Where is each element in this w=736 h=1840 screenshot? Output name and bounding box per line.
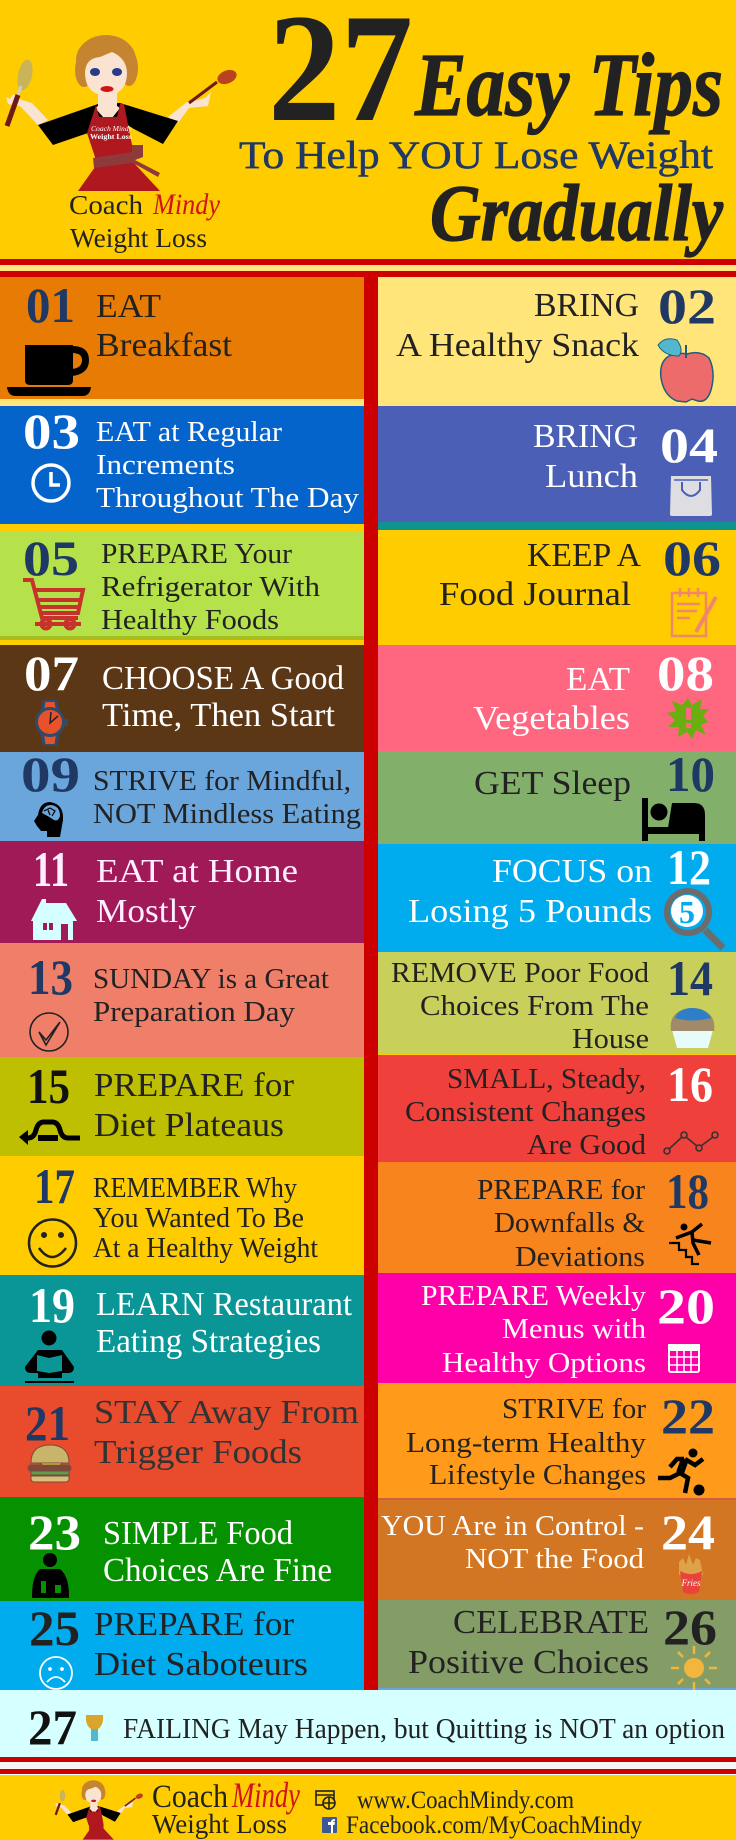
tip 11: Mostly bbox=[96, 893, 196, 930]
icon: coffee cup bbox=[7, 345, 91, 396]
tip 13: Preparation Day bbox=[93, 996, 296, 1028]
footer logo text: Mindy bbox=[231, 1775, 300, 1815]
tip 03: EAT at Regular bbox=[96, 416, 282, 448]
tip 08: EAT bbox=[566, 661, 630, 698]
logo text: Coach bbox=[69, 190, 144, 220]
tip 16: 16 bbox=[667, 1056, 713, 1112]
icon: cupcake bbox=[671, 1008, 714, 1048]
tip 23 bbox=[0, 1497, 364, 1601]
website text: www.CoachMindy.com bbox=[357, 1787, 575, 1814]
icon: fries bbox=[679, 1554, 703, 1594]
tip 24: NOT the Food bbox=[465, 1543, 645, 1575]
tip 08: 08 bbox=[657, 645, 714, 701]
tip 05: 05 bbox=[23, 530, 79, 586]
footer logo text: Coach bbox=[152, 1779, 228, 1815]
tip 01 bbox=[0, 277, 364, 406]
footer bbox=[0, 1775, 736, 1840]
tip 17: REMEMBER Why bbox=[93, 1172, 297, 1204]
tip 03: Throughout The Day bbox=[96, 482, 360, 514]
tip 20: PREPARE Weekly bbox=[421, 1280, 647, 1312]
tip 07: 07 bbox=[24, 645, 79, 701]
icon: smiley bbox=[29, 1220, 76, 1266]
tip 23: Choices Are Fine bbox=[103, 1552, 332, 1589]
tip 05: PREPARE Your bbox=[101, 538, 292, 570]
tip 23: SIMPLE Food bbox=[103, 1515, 293, 1552]
tip 18: Downfalls & bbox=[494, 1207, 645, 1239]
tip 20: Menus with bbox=[502, 1313, 647, 1345]
tip 07: Time, Then Start bbox=[102, 697, 336, 734]
tip 17 bbox=[0, 1156, 364, 1275]
tip 18: PREPARE for bbox=[477, 1174, 645, 1206]
tip 03: 03 bbox=[23, 403, 80, 459]
icon: line chart bbox=[664, 1132, 718, 1154]
footer mascot bbox=[55, 1780, 144, 1840]
tip 08: Vegetables bbox=[473, 700, 630, 737]
icon: green burst bbox=[667, 698, 709, 739]
tip 04: 04 bbox=[660, 417, 718, 473]
tip 01: EAT bbox=[96, 288, 161, 325]
icon: apple bbox=[658, 339, 713, 402]
tip 19: Eating Strategies bbox=[96, 1323, 321, 1360]
title bbox=[239, 0, 723, 258]
tip 12: FOCUS on bbox=[492, 853, 652, 890]
tip 14: REMOVE Poor Food bbox=[391, 957, 650, 989]
logo text bbox=[69, 188, 221, 253]
tip 03: Increments bbox=[96, 449, 235, 481]
tip 26: Positive Choices bbox=[408, 1644, 649, 1681]
tip 15: Diet Plateaus bbox=[94, 1107, 284, 1144]
tip 03 bbox=[0, 403, 364, 531]
tip 14: Choices From The bbox=[420, 990, 649, 1022]
tip 08 bbox=[378, 645, 736, 751]
tip 17: 17 bbox=[34, 1158, 75, 1214]
tip 09 bbox=[0, 746, 364, 841]
tip 02: 02 bbox=[658, 278, 716, 334]
tip 26: CELEBRATE bbox=[453, 1604, 649, 1641]
icon: falling on stairs bbox=[669, 1224, 711, 1264]
icon: web bbox=[316, 1791, 335, 1809]
tip 12: 12 bbox=[667, 839, 711, 895]
tip 16 bbox=[378, 1055, 736, 1162]
tip 13: 13 bbox=[28, 949, 73, 1005]
tip 22 bbox=[378, 1383, 736, 1500]
tip 19: 19 bbox=[29, 1277, 75, 1333]
tip 15 bbox=[0, 1057, 364, 1156]
icon: runner with ball bbox=[658, 1448, 704, 1496]
tip 14: 14 bbox=[667, 950, 713, 1006]
tip 13 bbox=[0, 943, 364, 1057]
logo text: Weight Loss bbox=[70, 223, 207, 253]
tip 15: PREPARE for bbox=[94, 1067, 295, 1104]
tip 16: SMALL, Steady, bbox=[447, 1063, 646, 1095]
icon: facebook bbox=[322, 1817, 337, 1833]
tip 25: PREPARE for bbox=[94, 1606, 295, 1643]
tip 06: 06 bbox=[663, 530, 721, 586]
icon: sad face bbox=[40, 1657, 72, 1689]
tip 19: LEARN Restaurant bbox=[96, 1286, 353, 1323]
icon: sun bbox=[671, 1646, 717, 1690]
tip 22: Lifestyle Changes bbox=[429, 1459, 646, 1491]
tip 18 bbox=[378, 1162, 736, 1273]
tip 06: Food Journal bbox=[439, 576, 631, 613]
title: To Help YOU Lose Weight bbox=[239, 134, 713, 177]
icon: magnifier bbox=[667, 891, 723, 948]
tip 27 bbox=[0, 1690, 736, 1757]
tip 14 bbox=[378, 950, 736, 1055]
tip 09: NOT Mindless Eating bbox=[93, 798, 361, 830]
tip 07 bbox=[0, 645, 364, 752]
tip 06 bbox=[378, 530, 736, 645]
tip 20: Healthy Options bbox=[442, 1347, 646, 1379]
footer logo text: Weight Loss bbox=[152, 1809, 287, 1839]
center divider bbox=[364, 277, 378, 1690]
tip 04: Lunch bbox=[545, 458, 638, 495]
tip 18: 18 bbox=[666, 1163, 709, 1219]
icon: check circle bbox=[30, 1013, 68, 1051]
tip 18: Deviations bbox=[515, 1241, 645, 1273]
icon: burger bbox=[28, 1445, 71, 1482]
tip 07: CHOOSE A Good bbox=[102, 660, 344, 697]
tip 10 bbox=[378, 746, 736, 844]
tip 22: Long-term Healthy bbox=[406, 1427, 647, 1459]
tip 12 bbox=[378, 839, 736, 952]
tip 05: Refrigerator With bbox=[101, 571, 321, 603]
footer logo text bbox=[152, 1775, 300, 1839]
tip 21: STAY Away From bbox=[94, 1394, 359, 1431]
tip 05 bbox=[0, 530, 364, 645]
tip 10: GET Sleep bbox=[474, 765, 631, 802]
mascot: Coach Mindy: Coach Mindy bbox=[91, 125, 133, 133]
tip 24 bbox=[378, 1500, 736, 1600]
icon: trophy bbox=[86, 1715, 103, 1741]
icon: shopping cart bbox=[23, 580, 83, 628]
tip 05: Healthy Foods bbox=[101, 604, 279, 636]
tip 04 bbox=[378, 406, 736, 530]
tip 06: KEEP A bbox=[527, 537, 641, 574]
tip 23: 23 bbox=[28, 1504, 81, 1560]
tip 25 bbox=[0, 1600, 364, 1690]
tip 11: 11 bbox=[33, 841, 69, 897]
tip 22: 22 bbox=[661, 1388, 715, 1444]
tip 20: 20 bbox=[657, 1278, 715, 1334]
tip 20 bbox=[378, 1273, 736, 1383]
tip 21: 21 bbox=[25, 1395, 70, 1451]
icon: person reading bbox=[25, 1330, 74, 1383]
tip 24: 24 bbox=[661, 1504, 715, 1560]
tip 11: EAT at Home bbox=[96, 853, 298, 890]
icon: clock bbox=[33, 465, 69, 501]
icon: person at table bbox=[32, 1553, 69, 1598]
tip 25: Diet Saboteurs bbox=[94, 1646, 308, 1683]
mascot: Coach Mindy: Weight Loss bbox=[90, 133, 132, 141]
icon: plateau arrow bbox=[19, 1122, 80, 1145]
tip 01: Breakfast bbox=[96, 327, 233, 364]
tip 17: At a Healthy Weight bbox=[93, 1232, 318, 1264]
tip 01: 01 bbox=[26, 277, 75, 333]
tip 02: BRING bbox=[534, 287, 639, 324]
tip 21: Trigger Foods bbox=[94, 1434, 302, 1471]
tip 15: 15 bbox=[27, 1058, 70, 1114]
tip 12: Losing 5 Pounds bbox=[408, 893, 652, 930]
tip 24: YOU Are in Control - bbox=[381, 1510, 644, 1542]
icon: wristwatch bbox=[36, 700, 68, 746]
icon: head with brain bbox=[34, 802, 63, 837]
icon: notepad bbox=[672, 588, 716, 636]
tip 26 bbox=[378, 1599, 736, 1690]
tip 04: BRING bbox=[533, 418, 638, 455]
tip 14: House bbox=[572, 1023, 649, 1055]
tip 21 bbox=[0, 1386, 364, 1497]
icon: house bbox=[31, 899, 77, 940]
icon: calendar bbox=[669, 1345, 699, 1372]
mascot: Coach Mindy bbox=[6, 35, 239, 191]
tip 16: Are Good bbox=[527, 1129, 647, 1161]
tip 10: 10 bbox=[666, 746, 715, 802]
tip 27: 27 bbox=[28, 1699, 77, 1755]
tip 19 bbox=[0, 1275, 364, 1386]
tip 26: 26 bbox=[663, 1599, 717, 1655]
tip 17: You Wanted To Be bbox=[93, 1202, 304, 1234]
icon: bed bbox=[642, 798, 705, 841]
tip 25: 25 bbox=[29, 1600, 80, 1656]
tip 02: A Healthy Snack bbox=[396, 327, 639, 364]
tip 02 bbox=[378, 277, 736, 406]
facebook text: Facebook.com/MyCoachMindy bbox=[346, 1812, 642, 1839]
header background bbox=[0, 0, 736, 259]
tip 22: STRIVE for bbox=[502, 1393, 646, 1425]
icon: fries: Fries bbox=[680, 1578, 701, 1588]
tip 11 bbox=[0, 841, 364, 943]
tip 13: SUNDAY is a Great bbox=[93, 963, 329, 995]
tip 09: STRIVE for Mindful, bbox=[93, 765, 351, 797]
tip 09: 09 bbox=[21, 746, 80, 802]
logo text: Mindy bbox=[152, 188, 221, 221]
tip 16: Consistent Changes bbox=[405, 1096, 646, 1128]
icon: magnifier: 5 bbox=[679, 894, 695, 930]
icon: shopping bag bbox=[670, 476, 712, 516]
